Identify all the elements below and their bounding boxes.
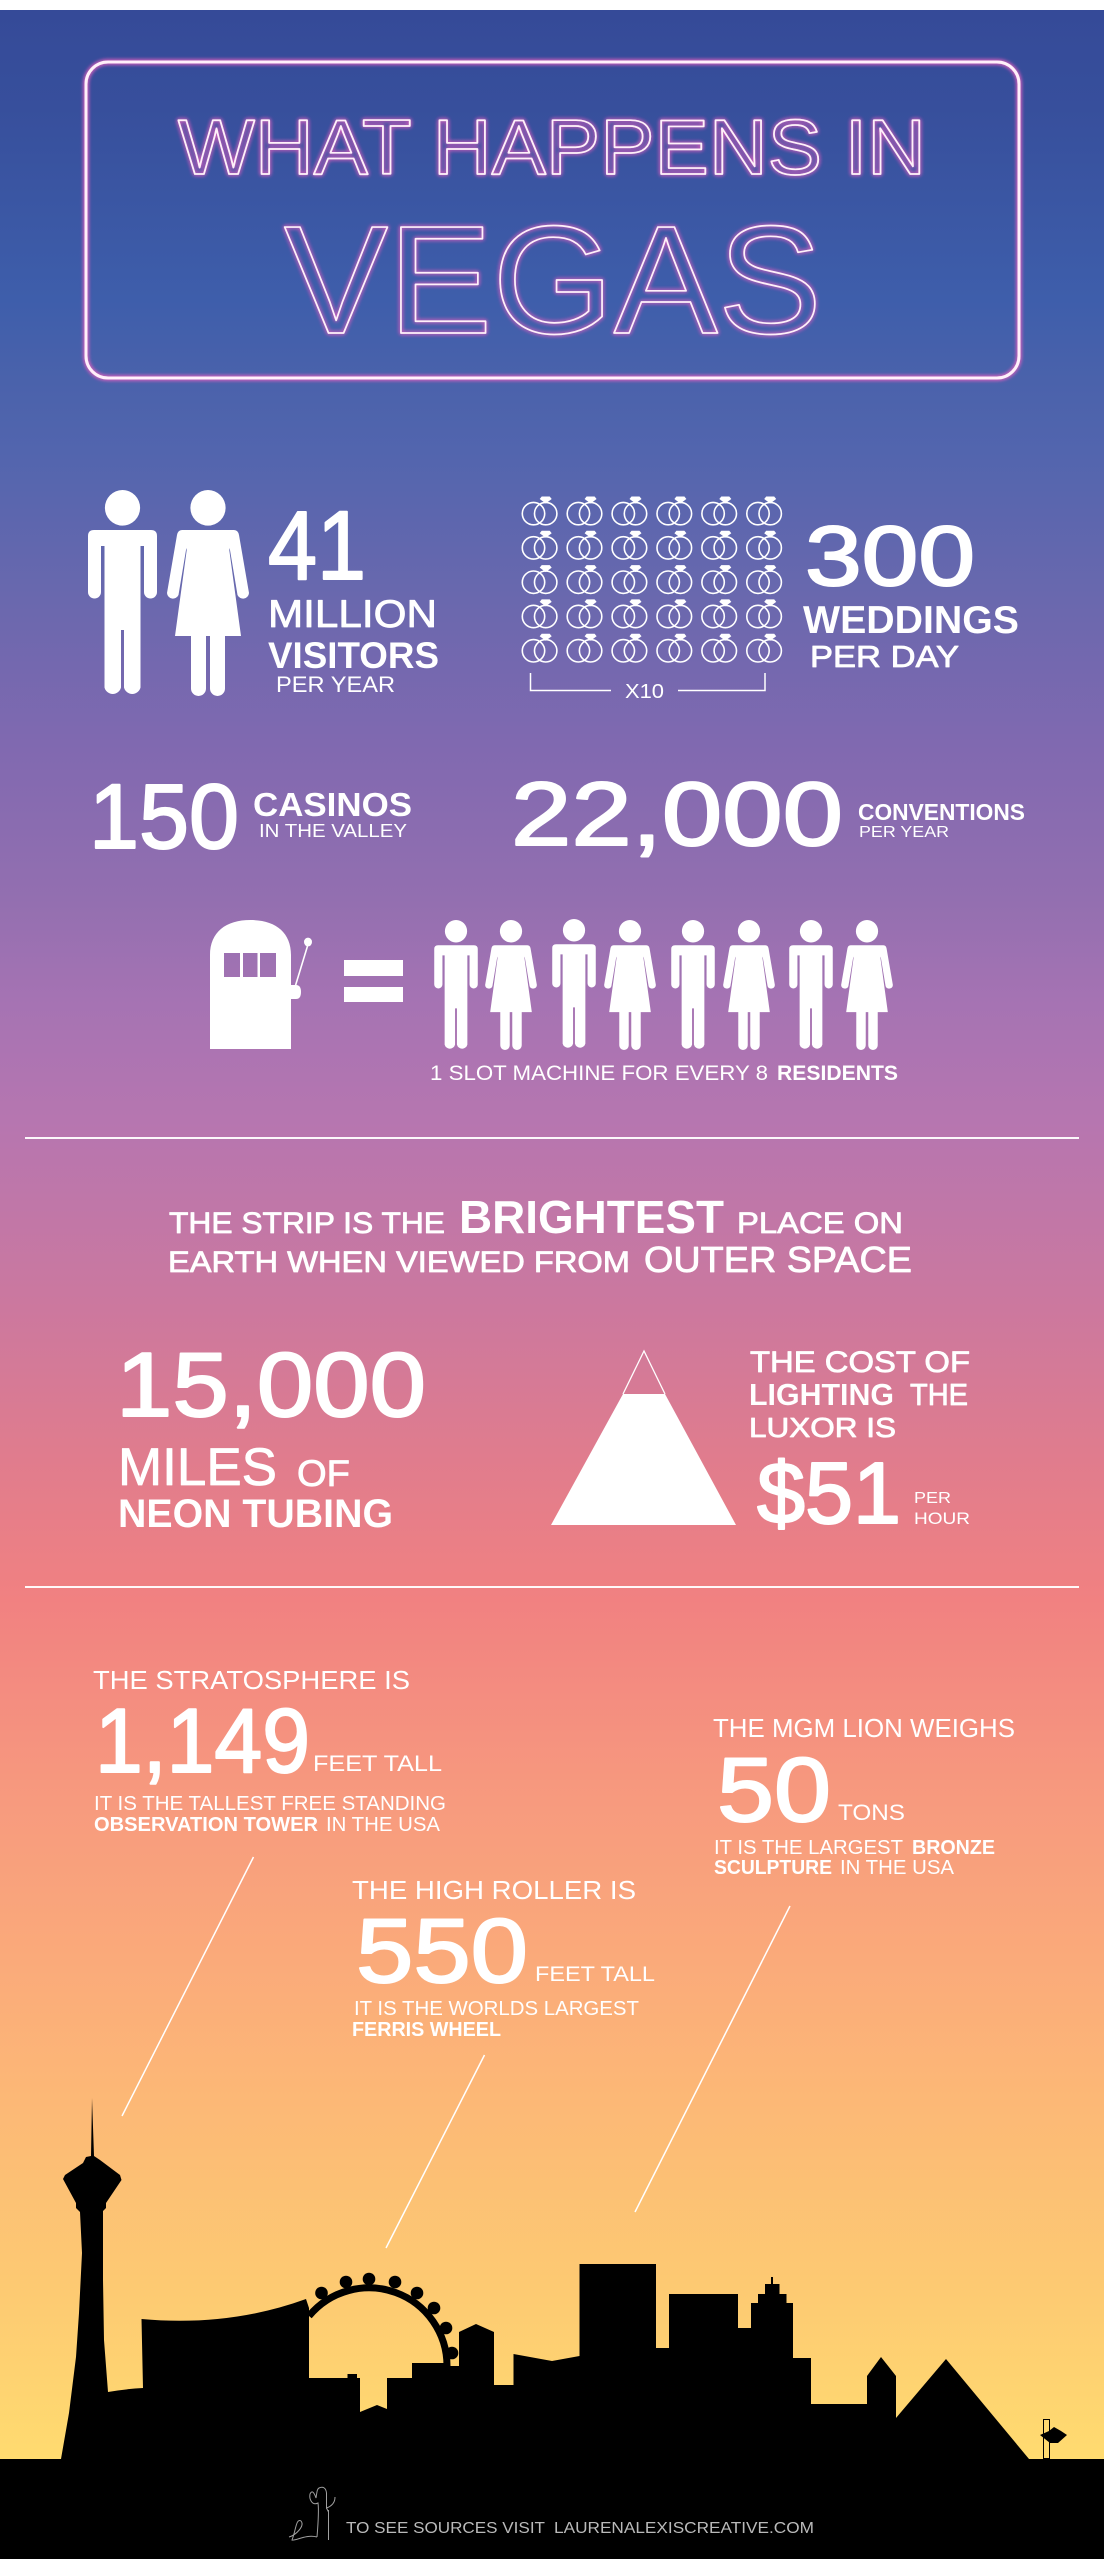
callout: mgm lion: IT IS THE LARGEST bbox=[714, 1837, 903, 1859]
label weddings: WEDDINGS bbox=[803, 599, 1019, 642]
number $51: $51 bbox=[757, 1445, 901, 1542]
sources text bbox=[346, 2520, 814, 2537]
neon frame bbox=[86, 62, 1019, 378]
callout: high roller: 550 bbox=[356, 1901, 528, 2002]
stat: cost of lighting the luxor bbox=[749, 1346, 970, 1542]
label per hour: HOUR bbox=[914, 1509, 970, 1528]
callout: mgm lion: THE MGM LION WEIGHS bbox=[713, 1713, 1015, 1743]
label miles of: OF bbox=[297, 1453, 350, 1494]
stat: 41 million visitors bbox=[88, 490, 439, 697]
number 22,000: 22,000 bbox=[511, 765, 843, 865]
callout: stratosphere bbox=[93, 1665, 446, 1836]
stat: cost of lighting the luxor: LIGHTING bbox=[749, 1377, 894, 1412]
label per year: PER YEAR bbox=[276, 672, 395, 697]
caption: 1 SLOT MACHINE FOR EVERY 8 bbox=[430, 1062, 768, 1085]
heading: brightest place: THE STRIP IS THE bbox=[169, 1207, 445, 1240]
callout: high roller: FERRIS WHEEL bbox=[352, 2019, 501, 2041]
label per year: PER YEAR bbox=[859, 824, 949, 841]
stat: cost of lighting the luxor: THE COST OF bbox=[750, 1346, 970, 1379]
number 150: 150 bbox=[89, 766, 239, 868]
ferris wheel ring bbox=[309, 2288, 447, 2366]
callout: stratosphere: 1,149 bbox=[95, 1691, 310, 1792]
callout: mgm lion: TONS bbox=[838, 1800, 905, 1825]
heading: brightest place bbox=[168, 1191, 912, 1280]
callout: stratosphere: IT IS THE TALLEST FREE STANDING bbox=[94, 1793, 446, 1815]
label conventions: CONVENTIONS bbox=[858, 799, 1025, 825]
stat: 22,000 conventions bbox=[511, 765, 1025, 865]
icon: grid of rings bbox=[522, 496, 781, 662]
label casinos: CASINOS bbox=[253, 786, 412, 823]
welcome sign bbox=[1040, 2419, 1067, 2459]
callout: high roller: FEET TALL bbox=[535, 1963, 655, 1986]
heading: brightest place: EARTH WHEN VIEWED FROM bbox=[168, 1246, 630, 1279]
number 15,000: 15,000 bbox=[116, 1335, 426, 1436]
callout: high roller: IT IS THE WORLDS LARGEST bbox=[354, 1998, 639, 2020]
label miles of bbox=[118, 1438, 350, 1497]
sources text: LAURENALEXISCREATIVE.COM bbox=[554, 2520, 814, 2537]
callout: stratosphere: OBSERVATION TOWER bbox=[94, 1814, 319, 1836]
stat: 150 casinos bbox=[89, 766, 412, 868]
label per hour bbox=[914, 1490, 970, 1528]
title neon sign bbox=[86, 62, 1019, 378]
icon: luxor pyramid bbox=[551, 1351, 736, 1525]
callout: mgm lion: 50 bbox=[717, 1740, 831, 1841]
label miles of: MILES bbox=[118, 1438, 277, 1497]
label per day: PER DAY bbox=[810, 639, 959, 674]
callout: mgm lion: SCULPTURE bbox=[714, 1857, 832, 1879]
stat: cost of lighting the luxor: LUXOR IS bbox=[749, 1412, 896, 1443]
icon: slot machine bbox=[210, 920, 312, 1049]
callout: stratosphere: IN THE USA bbox=[326, 1814, 441, 1836]
label million: MILLION bbox=[268, 593, 437, 636]
label per hour: PER bbox=[914, 1490, 951, 1507]
callout: stratosphere: THE STRATOSPHERE IS bbox=[93, 1665, 410, 1695]
stat: 15,000 miles of neon bbox=[116, 1335, 426, 1536]
ferris wheel gondolas bbox=[315, 2273, 458, 2359]
icon: man and woman bbox=[88, 490, 249, 696]
skyline silhouette bbox=[0, 2098, 1104, 2559]
title line: what happens in: WHAT HAPPENS IN bbox=[178, 103, 926, 191]
title line: vegas: VEGAS bbox=[284, 194, 822, 366]
stat: cost of lighting the luxor: THE bbox=[910, 1377, 968, 1412]
label neon tubing: NEON TUBING bbox=[118, 1492, 393, 1536]
icon: cactus logo bbox=[289, 2487, 335, 2540]
bracket times ten bbox=[530, 673, 765, 690]
heading: brightest place: PLACE ON bbox=[737, 1207, 903, 1240]
number 41: 41 bbox=[268, 491, 366, 600]
pointer lines bbox=[122, 1857, 790, 2248]
callout: high roller: THE HIGH ROLLER IS bbox=[352, 1875, 636, 1905]
callout: mgm lion bbox=[713, 1713, 1015, 1879]
callout: high roller bbox=[352, 1875, 655, 2041]
label in the valley: IN THE VALLEY bbox=[259, 821, 407, 841]
label visitors: VISITORS bbox=[268, 635, 439, 676]
caption: RESIDENTS bbox=[777, 1062, 898, 1085]
callout: mgm lion: BRONZE bbox=[912, 1837, 995, 1859]
label x10: X10 bbox=[625, 681, 664, 703]
footer bbox=[289, 2487, 814, 2540]
icon: equals sign bbox=[344, 960, 403, 1002]
callout: stratosphere: FEET TALL bbox=[313, 1751, 442, 1776]
icon: eight residents bbox=[434, 919, 893, 1050]
heading: brightest place: BRIGHTEST bbox=[459, 1191, 724, 1243]
stat: slot machines per resident bbox=[210, 919, 898, 1085]
callout: mgm lion: IN THE USA bbox=[840, 1857, 955, 1879]
stat: 300 weddings bbox=[522, 496, 1019, 703]
caption bbox=[430, 1062, 898, 1085]
heading: brightest place: OUTER SPACE bbox=[644, 1239, 912, 1280]
sources text: TO SEE SOURCES VISIT bbox=[346, 2520, 545, 2537]
number 300: 300 bbox=[805, 509, 975, 603]
